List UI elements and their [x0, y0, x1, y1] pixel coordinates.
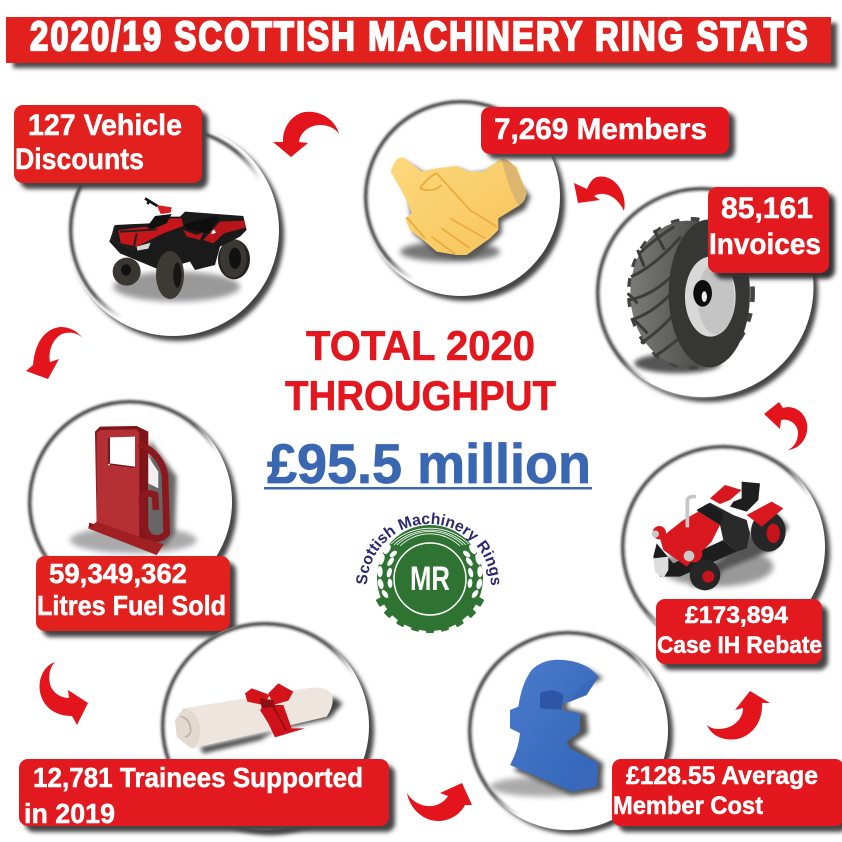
- label: 128.55 average member cost: [612, 759, 842, 832]
- label: 7,269 members: 7,269 Members: [494, 113, 707, 146]
- logo: scottish machinery rings: [356, 512, 500, 633]
- label: 59,349,362 litres fuel sold: 59,349,362: [49, 558, 187, 589]
- label: 59,349,362 litres fuel sold: [36, 556, 236, 637]
- label: 127 vehicle discounts: Discounts: [15, 143, 144, 176]
- arrow: member cost from trainees: [407, 783, 472, 821]
- panel: average member cost: [468, 630, 842, 834]
- heading: total 2020 throughput: TOTAL 2020: [306, 322, 535, 369]
- panel: trainees: [19, 622, 395, 835]
- label: 59,349,362 litres fuel sold: Litres Fuel Sold: [37, 590, 226, 621]
- icon: quad bike: [109, 198, 250, 302]
- arrow: vehicle discounts from members: [273, 112, 339, 157]
- title banner: 2020/19 SCOTTISH MACHINERY RING STATS: [30, 12, 808, 59]
- panel: vehicle discounts: [14, 105, 284, 341]
- label: 85,161 invoices: [708, 187, 835, 279]
- arrow: fuel from vehicle discounts: [26, 327, 85, 379]
- panel: members: [362, 98, 735, 301]
- heading: total 2020 throughput: [285, 322, 556, 419]
- arrow: members from invoices: [574, 176, 625, 211]
- label: 127 vehicle discounts: 127 Vehicle: [28, 109, 182, 142]
- label: trainees supported: [19, 759, 395, 832]
- label: 128.55 average member cost: £128.55 Average: [626, 762, 818, 790]
- arrow: trainees from fuel: [40, 662, 88, 725]
- logo: scottish machinery rings: MR: [410, 560, 450, 598]
- label: 127 vehicle discounts: [14, 105, 208, 189]
- label: 173,894 case ih rebate: [656, 599, 828, 670]
- panel: case ih rebate: [621, 445, 830, 670]
- label: 7,269 members: [481, 107, 735, 159]
- arrow: invoices from rebate: [764, 402, 807, 450]
- icon: handshake: [391, 157, 531, 262]
- label: 85,161 invoices: Invoices: [709, 228, 821, 261]
- label: trainees supported: in 2019: [24, 798, 115, 829]
- label: 173,894 case ih rebate: £173,894: [685, 602, 789, 629]
- label: trainees supported: 12,781 Trainees Supported: [33, 762, 363, 793]
- panel: fuel sold: [28, 400, 237, 637]
- icon: blue pound sign: [490, 660, 603, 797]
- icon: tractor tyre: [628, 219, 753, 373]
- heading: total 2020 throughput: THROUGHPUT: [285, 372, 556, 419]
- icon: fuel pump: [70, 426, 197, 555]
- label: 128.55 average member cost: Member Cost: [613, 792, 764, 820]
- icon: diploma scroll: [175, 683, 343, 753]
- panel: invoices: [594, 177, 835, 402]
- label: 85,161 invoices: 85,161: [721, 192, 813, 225]
- label: 173,894 case ih rebate: Case IH Rebate: [657, 632, 822, 659]
- arrow: rebate from member cost: [707, 691, 770, 739]
- total amount: £95.5 million: [267, 432, 591, 495]
- icon: red toy tractor: [652, 482, 788, 590]
- logo: scottish machinery rings: Scottish Machinery Rings: [356, 512, 500, 586]
